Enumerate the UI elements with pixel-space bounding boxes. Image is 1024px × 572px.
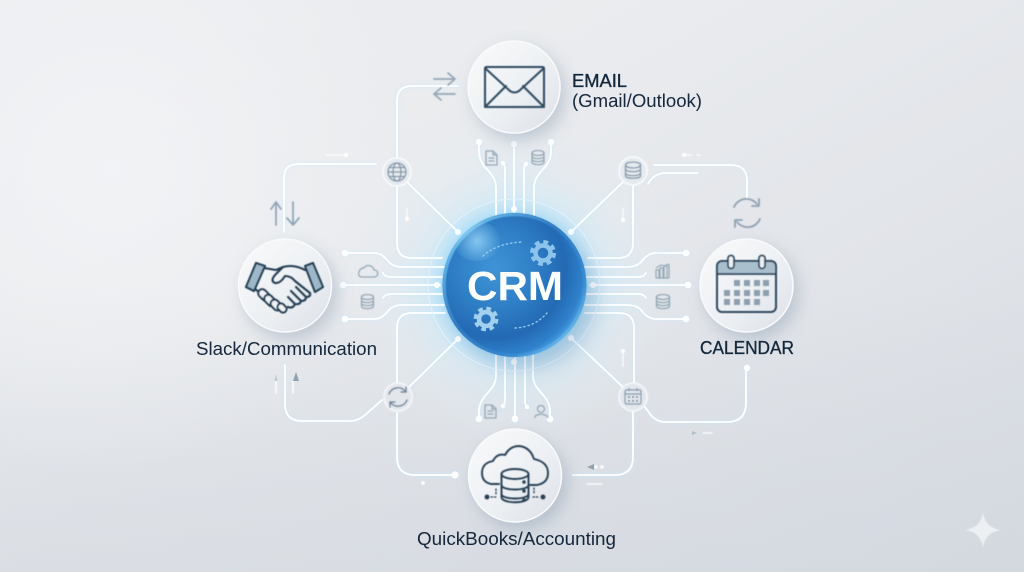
label: Slack: Slack/Communication [196,339,377,359]
connector: Slack lower inner [383,294,444,298]
hub: calendar [619,383,647,411]
connector: email middle [513,144,515,215]
hub: database [619,157,647,185]
icon: cloud near Slack [359,266,378,277]
hub: globe [383,158,411,186]
sphere highlight [453,221,501,261]
central glow [349,120,679,450]
icon: document near email [486,151,497,165]
connector dots [340,139,750,479]
icon: cloud with database [482,446,548,502]
connector: globe hub to Slack [284,164,376,232]
connector: calendar hub diagonal [571,338,623,387]
connector: database hub to sphere [588,185,633,258]
connector: email inner right [524,164,526,218]
connector: email to globe hub [397,86,458,158]
connector: calendar middle [590,284,688,286]
CRM sphere [428,199,600,371]
connector: calendar hub to calendar label [645,368,746,422]
small data ticks [276,154,712,484]
icon: coins near calendar [656,294,670,309]
connector: globe diagonal [407,182,458,232]
connector: database hub diagonal [571,182,623,232]
small arrowheads [274,372,697,470]
connector: calendar lower outer [585,305,686,319]
connector: books inner left [503,352,505,406]
icon: handshake [246,263,323,314]
icon: sync arrows above calendar [734,199,760,227]
gear bottom left [476,308,496,330]
icon: document near books [485,405,496,418]
connector network [284,86,750,479]
gear top right [532,242,554,264]
label: email: EMAIL [572,71,627,91]
connector: sync diagonal [408,339,458,388]
connector: books middle [514,355,516,419]
connector: globe hub to sphere [397,186,442,258]
connector: Slack upper outer [345,253,444,267]
CRM label: CRM [467,263,563,309]
icon: database near email [532,150,544,165]
label: QuickBooks: QuickBooks/Accounting [417,529,616,549]
icon: bar chart near calendar [656,264,669,278]
connector: calendar lower inner [585,294,646,298]
connector: calendar upper outer [585,253,686,267]
connector: books outer left [479,352,496,419]
connector: sync hub to Slack [285,365,382,421]
connector: books inner right [525,352,527,407]
icon: sparkle watermark [965,512,1001,548]
connector: email outer left [479,142,496,218]
label: email [572,71,702,111]
connector: sphere to calendar hub [585,313,634,383]
label: calendar: CALENDAR [700,338,794,358]
label: email: (Gmail/Outlook) [572,91,702,111]
hub: sync [384,383,412,411]
icon: database near Slack [362,294,374,309]
connector: Slack middle [343,284,440,286]
dotted arcs [483,242,547,328]
connector: email inner left [503,163,505,218]
connector: books outer right [533,352,550,419]
connector: sync hub to books [397,413,455,475]
connector: database hub to calendar [654,165,747,198]
icon: exchange arrows beside email [434,73,455,100]
connector: Slack upper inner [383,273,444,277]
connector: sphere to sync hub [397,313,445,383]
node: calendar [700,239,793,332]
node: email [468,41,560,133]
node: QuickBooks [468,429,562,522]
node: Slack [238,239,332,332]
icon: calendar [717,256,776,312]
icon: envelope [485,67,544,107]
connector: calendar upper inner [585,273,646,277]
icon: up and down arrows beside Slack [271,202,299,225]
connector: calendar hub to books [573,412,633,475]
icon: person near books [534,406,548,418]
connector: email outer right [534,142,551,218]
connector: Slack lower outer [345,305,444,319]
connector: database hub short branch [648,173,698,184]
